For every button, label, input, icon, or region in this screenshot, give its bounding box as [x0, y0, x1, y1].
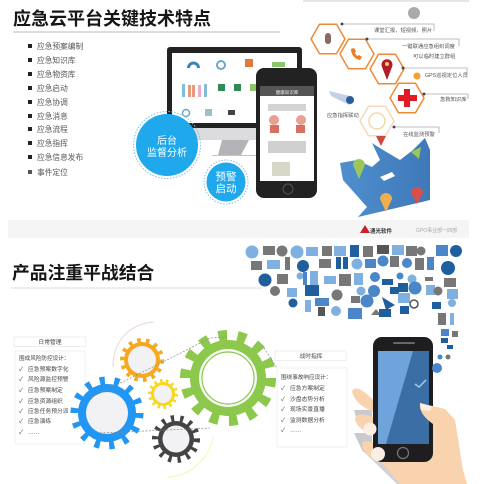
hand holding phone	[352, 389, 467, 484]
box: wartime command list: 监测数据分析	[290, 416, 325, 424]
feature labels	[327, 26, 468, 138]
box: wartime command list: ……	[290, 428, 302, 434]
hexagon: phone call	[340, 39, 374, 69]
box: daily management list: 应急预案数字化	[28, 365, 69, 373]
decorative grey dot	[408, 7, 420, 19]
feature labels: 急救知识库	[440, 95, 467, 103]
hexagon: first aid cross	[390, 83, 424, 113]
feature list: 应急协调	[37, 97, 68, 107]
feature labels: 在线监测预警	[403, 130, 435, 138]
box: wartime command heading	[275, 351, 346, 360]
box: daily management list: 应急预案制定	[28, 386, 63, 394]
orange dot	[414, 72, 420, 80]
box: wartime command list: ✓	[281, 396, 285, 403]
box: daily management list: 应急资源组织	[28, 397, 63, 405]
feature list: 应急物资库	[37, 69, 76, 79]
panel: peacetime and wartime combined	[11, 245, 467, 484]
box: wartime command list: 围绕事故响应设计：	[281, 373, 331, 381]
bubble: backend supervision: 后台	[157, 134, 177, 147]
box: daily management list: ✓	[19, 376, 23, 383]
box: daily management list: ✓	[19, 366, 23, 373]
box: daily management list: ✓	[19, 387, 23, 394]
box: daily management list: ……	[28, 430, 40, 436]
footer logo: 通光软件	[370, 227, 393, 235]
icon: surveillance camera	[329, 91, 354, 105]
icon cloud	[246, 245, 462, 373]
box: daily management list: 应急任务预分派	[28, 407, 69, 415]
box: daily management list: ✓	[19, 408, 23, 415]
box: daily management heading: 日常管理	[38, 338, 62, 346]
bubble: backend supervision: 监督分析	[147, 146, 187, 159]
box: wartime command list: 现场实景直播	[290, 405, 325, 413]
box: daily management list: 应急演练	[28, 417, 51, 425]
fingers over phone	[364, 403, 455, 461]
panel: key technology features	[8, 7, 469, 238]
gear: green	[186, 336, 270, 420]
box: wartime command list: 沙盘态势分析	[290, 395, 325, 403]
hexagon: alarm clock	[360, 106, 394, 136]
feature list: 事件定位	[37, 167, 68, 177]
feature labels: 课堂汇报、短视频、照片	[374, 26, 432, 34]
footer strip	[8, 220, 469, 238]
feature list: 应急预案编制	[37, 41, 83, 51]
connector lines for labels	[342, 24, 468, 133]
gear: blue	[75, 381, 139, 445]
bubble: warning start: 预警	[216, 170, 237, 183]
box: wartime command list: ✓	[281, 406, 285, 413]
box: wartime command list: ✓	[281, 427, 285, 434]
box: daily management list: ✓	[19, 398, 23, 405]
feature list: 应急流程	[37, 124, 68, 134]
footer department text: GPO事业部一四部	[416, 227, 457, 234]
dashed connector through gears	[92, 337, 277, 433]
box: wartime command list: ✓	[281, 385, 285, 392]
box: daily management list: 风险源监控预警	[28, 375, 69, 383]
feature labels: 可以临时建立群组	[413, 52, 456, 60]
box: daily management list: ✓	[19, 429, 23, 436]
bubble: warning start	[204, 160, 248, 204]
monitor with dashboard	[167, 47, 302, 156]
feature list: 应急启动	[37, 83, 68, 93]
arc arrow: pink	[113, 322, 154, 367]
footer logo	[360, 225, 393, 235]
feature labels: GPS巡视定位人员	[425, 71, 468, 79]
box: wartime command heading: 战时指挥	[299, 352, 323, 360]
box: daily management list: 围成风险防控设计：	[19, 354, 69, 362]
title: cloud platform features: 应急云平台关键技术特点	[13, 8, 211, 29]
map with location pins	[340, 136, 430, 217]
hexagon: microphone	[311, 24, 345, 54]
bubble: backend supervision	[134, 112, 200, 178]
gear: orange	[122, 340, 162, 380]
arc arrow: yellow	[168, 437, 214, 477]
bubble: warning start: 启动	[216, 182, 236, 195]
box: wartime command list: 应急方案制定	[290, 384, 325, 392]
feature list: 应急指挥	[37, 138, 68, 148]
box: daily management list	[15, 351, 85, 444]
smartphone with article	[256, 68, 317, 198]
gear: dark grey	[156, 418, 196, 460]
feature list	[28, 41, 83, 177]
feature list: 应急信息发布	[37, 152, 83, 162]
feature list: 应急知识库	[37, 55, 76, 65]
feature labels: 一键联通应急组织调度	[402, 42, 456, 50]
feature labels: 应急指挥联动	[327, 111, 359, 119]
connector end dots	[341, 22, 426, 128]
box: daily management heading	[14, 337, 86, 346]
box: daily management list: ✓	[19, 418, 23, 425]
hexagon: map pin	[370, 54, 404, 84]
box: wartime command list	[277, 368, 347, 447]
title: peacetime wartime: 产品注重平战结合	[12, 262, 154, 283]
smartphone with article: 健康知识库	[276, 89, 299, 96]
smartphone with blue screen	[373, 337, 433, 462]
box: wartime command list: ✓	[281, 417, 285, 424]
gear: yellow	[150, 381, 176, 407]
feature list: 应急消息	[37, 111, 68, 121]
